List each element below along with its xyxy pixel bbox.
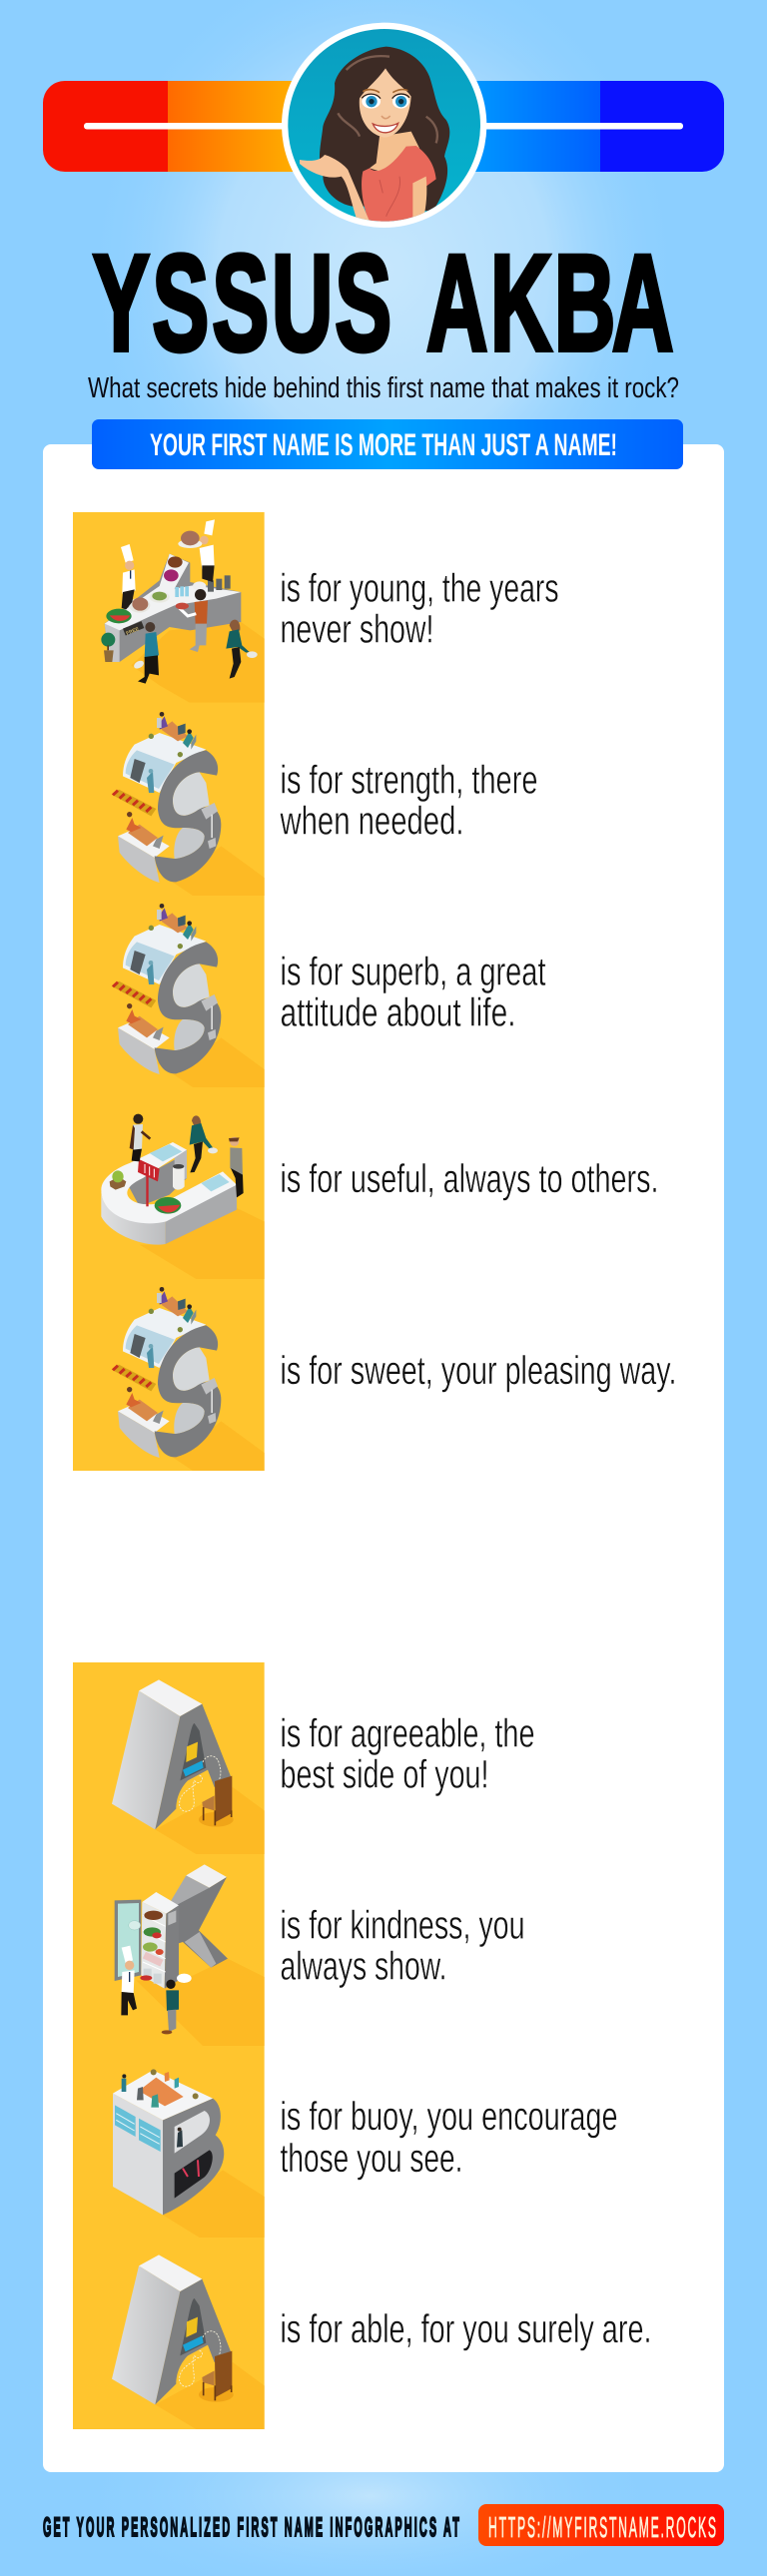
text row 2: when needed. bbox=[280, 799, 463, 843]
tile: S superb bbox=[73, 896, 265, 1087]
customer woman bbox=[226, 620, 258, 679]
text row 2: is for strength, there bbox=[280, 759, 537, 803]
right chef bbox=[178, 519, 215, 582]
left chef bbox=[121, 544, 136, 609]
avatar portrait bbox=[282, 23, 486, 228]
tile: S sweet bbox=[73, 1279, 265, 1471]
woman left bbox=[130, 1114, 150, 1161]
text row 1: never show! bbox=[280, 607, 433, 651]
text row 7: is for kindness, you bbox=[280, 1903, 525, 1947]
text row 3 bbox=[280, 951, 545, 1034]
tile: S strength bbox=[73, 704, 265, 896]
potted plant bbox=[101, 633, 115, 662]
text row 6: best side of you! bbox=[280, 1753, 489, 1797]
text row 8: those you see. bbox=[280, 2137, 463, 2181]
text row 7 bbox=[280, 1903, 525, 1989]
customer orange bbox=[176, 581, 208, 652]
tile: A able bbox=[73, 2238, 265, 2429]
customer teal bbox=[138, 622, 159, 684]
tile: Y buffet: FREE bbox=[126, 626, 141, 637]
bar white line bbox=[84, 123, 683, 130]
tile: Y buffet bbox=[73, 512, 265, 704]
text row 8: is for buoy, you encourage bbox=[280, 2095, 617, 2139]
footer call to action: GET YOUR PERSONALIZED FIRST NAME INFOGRAPHICS AT bbox=[43, 2512, 459, 2543]
tile: B buoy bbox=[73, 2046, 265, 2238]
tile: A agreeable bbox=[73, 1662, 265, 1854]
man right bbox=[229, 1137, 244, 1197]
woman centre bbox=[190, 1115, 218, 1172]
tile: U useful bbox=[73, 1087, 265, 1279]
text row 3: attitude about life. bbox=[280, 990, 515, 1034]
text row 6 bbox=[280, 1711, 535, 1797]
text row 6: is for agreeable, the bbox=[280, 1711, 535, 1755]
chef figure bbox=[121, 1946, 137, 2015]
main white panel bbox=[43, 444, 724, 2472]
blue banner bbox=[92, 419, 683, 469]
text row 8 bbox=[280, 2095, 617, 2181]
text row 2 bbox=[280, 759, 537, 843]
man figure with speech bubble bbox=[162, 1974, 192, 2034]
header colour bar bbox=[43, 81, 724, 172]
text row 3: is for superb, a great bbox=[280, 951, 545, 994]
text row 1 bbox=[280, 567, 559, 651]
text row 1: is for young, the years bbox=[280, 567, 559, 611]
title: YSSUS AKBA bbox=[93, 228, 673, 380]
footer url button: HTTPS://MYFIRSTNAME.ROCKS bbox=[488, 2511, 716, 2544]
tile: K kindness bbox=[73, 1854, 265, 2046]
text row 7: always show. bbox=[280, 1945, 447, 1989]
